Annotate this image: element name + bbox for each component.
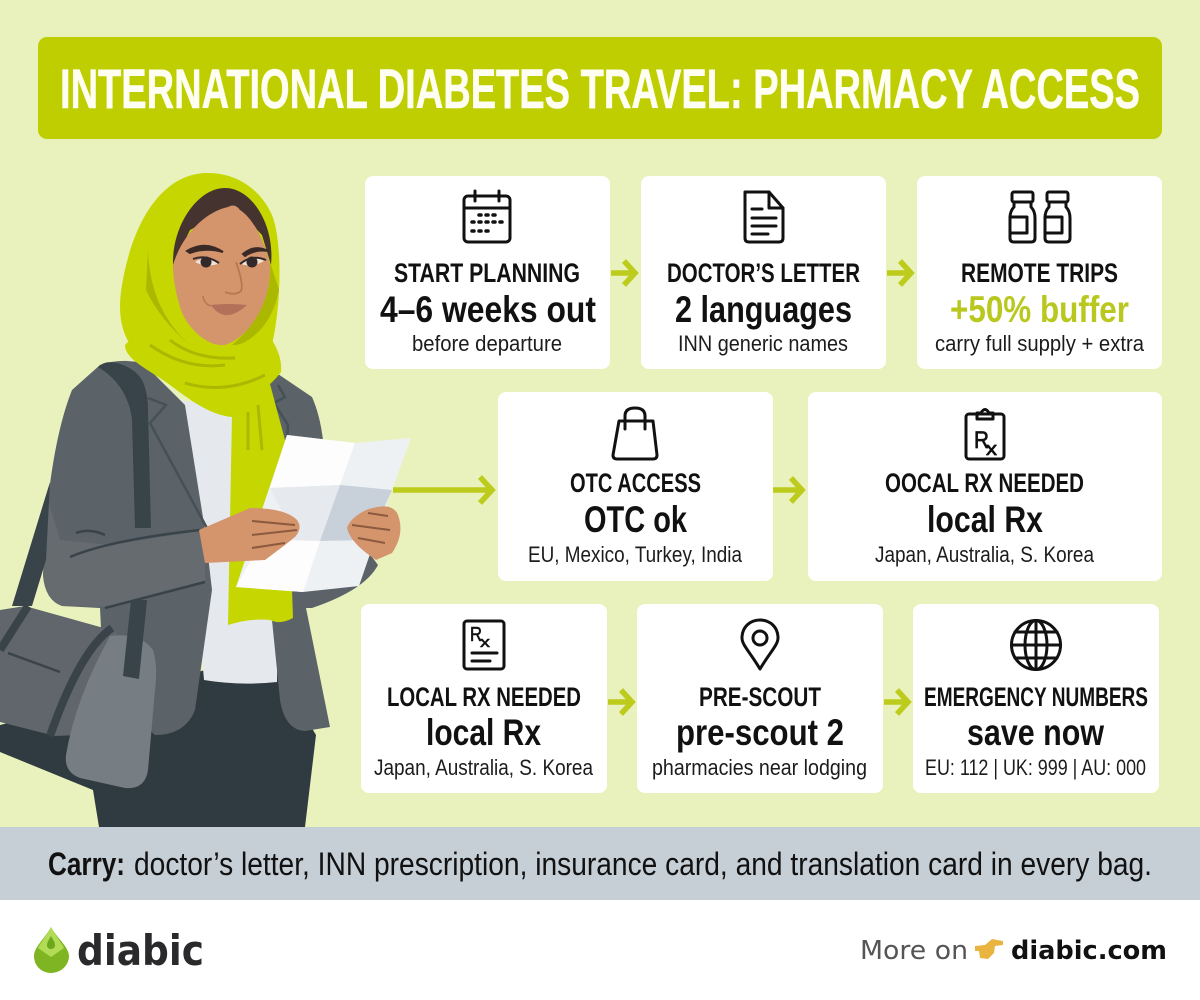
bag strap over shoulder	[98, 362, 151, 528]
icon: prescription sheet: R	[470, 624, 482, 646]
icon: pointing hand	[975, 939, 1003, 959]
panel: local Rx needed (lower): local Rx	[426, 712, 541, 753]
panel: local Rx needed (upper): local Rx	[927, 499, 1043, 540]
icon: clipboard Rx: R	[974, 427, 989, 454]
panel: pre-scout: pharmacies near lodging	[652, 755, 867, 780]
paper	[236, 435, 411, 592]
nose	[225, 262, 242, 294]
panel: start planning: START PLANNING	[394, 258, 580, 288]
title banner	[38, 37, 1162, 139]
panel: local Rx needed (upper): Japan, Australia, S. Korea	[875, 542, 1095, 567]
icon: clipboard Rx	[966, 410, 1004, 459]
panel: doctor's letter	[641, 176, 886, 369]
sleeve folds	[70, 530, 200, 557]
icon: diabic logo drop	[34, 927, 69, 973]
panel: local Rx needed (lower): LOCAL RX NEEDED	[387, 682, 581, 712]
panel: remote trips: +50% buffer	[950, 289, 1129, 330]
panel: emergency numbers: save now	[967, 712, 1104, 753]
panel: OTC access	[498, 392, 773, 581]
face	[173, 206, 270, 345]
footer: More on	[860, 936, 968, 966]
panel: local Rx needed (lower)	[361, 604, 607, 793]
icon: map pin	[742, 620, 778, 669]
scarf back	[120, 173, 280, 358]
carry bar	[0, 827, 1200, 900]
arrow	[611, 261, 635, 285]
panel: remote trips	[917, 176, 1162, 369]
panel: local Rx needed (upper): OOCAL RX NEEDED	[885, 468, 1084, 498]
icon: calendar	[464, 191, 510, 242]
strap buckle tail	[123, 600, 147, 679]
footer: diabic	[77, 926, 204, 975]
panel: pre-scout: pre-scout 2	[676, 712, 844, 753]
footer	[0, 900, 1200, 1000]
panel: doctor's letter: 2 languages	[675, 289, 852, 330]
panel: start planning: 4–6 weeks out	[380, 289, 596, 330]
icon: prescription sheet	[464, 621, 504, 669]
panel: emergency numbers	[913, 604, 1159, 793]
left hand	[199, 508, 300, 563]
panel: pre-scout: PRE-SCOUT	[699, 682, 821, 712]
lapels	[148, 398, 208, 530]
panel: start planning	[365, 176, 610, 369]
illustration: woman in green headscarf holding a paper, with shoulder bag	[0, 173, 411, 827]
panel: start planning: before departure	[412, 331, 562, 356]
shirt	[180, 400, 278, 684]
footer: diabic.com	[1011, 936, 1167, 966]
panel: local Rx needed (lower): Japan, Australia, S. Korea	[374, 755, 594, 780]
icon: document	[745, 192, 783, 242]
panel: doctor's letter: DOCTOR’S LETTER	[667, 258, 860, 288]
arrow	[608, 690, 632, 714]
panel: pre-scout	[637, 604, 883, 793]
panel: remote trips: REMOTE TRIPS	[961, 258, 1118, 288]
hair	[173, 188, 271, 265]
scarf hanging tail	[228, 384, 293, 625]
carry bar: Carry:	[48, 846, 125, 882]
panel: OTC access: OTC ok	[584, 499, 687, 540]
arrow	[887, 261, 911, 285]
scarf neck wrap	[125, 332, 281, 417]
bag front pocket	[66, 635, 156, 788]
arrow: from paper to OTC access	[393, 477, 492, 503]
icon: globe	[1012, 620, 1060, 670]
neck	[186, 320, 238, 350]
panel: emergency numbers: EU: 112 | UK: 999 | AU: 000	[925, 755, 1146, 780]
icon: two vials	[1010, 192, 1070, 242]
icon: prescription sheet: x	[480, 634, 491, 651]
panel: local Rx needed (upper)	[808, 392, 1162, 581]
eyes	[195, 258, 264, 266]
skirt	[0, 670, 316, 827]
brows	[187, 246, 268, 256]
icon: clipboard Rx: x	[986, 439, 997, 459]
mouth	[211, 304, 247, 315]
jacket	[43, 361, 212, 735]
scarf shadow folds	[146, 250, 190, 345]
panel: remote trips: carry full supply + extra	[935, 331, 1145, 356]
panel: OTC access: EU, Mexico, Turkey, India	[528, 542, 743, 567]
bag body	[0, 606, 118, 736]
arrow	[884, 690, 908, 714]
right hand	[347, 506, 400, 560]
panel: doctor's letter: INN generic names	[678, 331, 848, 356]
panel: OTC access: OTC ACCESS	[570, 468, 701, 498]
icon: shopping bag	[613, 408, 657, 459]
arrow	[773, 478, 802, 502]
